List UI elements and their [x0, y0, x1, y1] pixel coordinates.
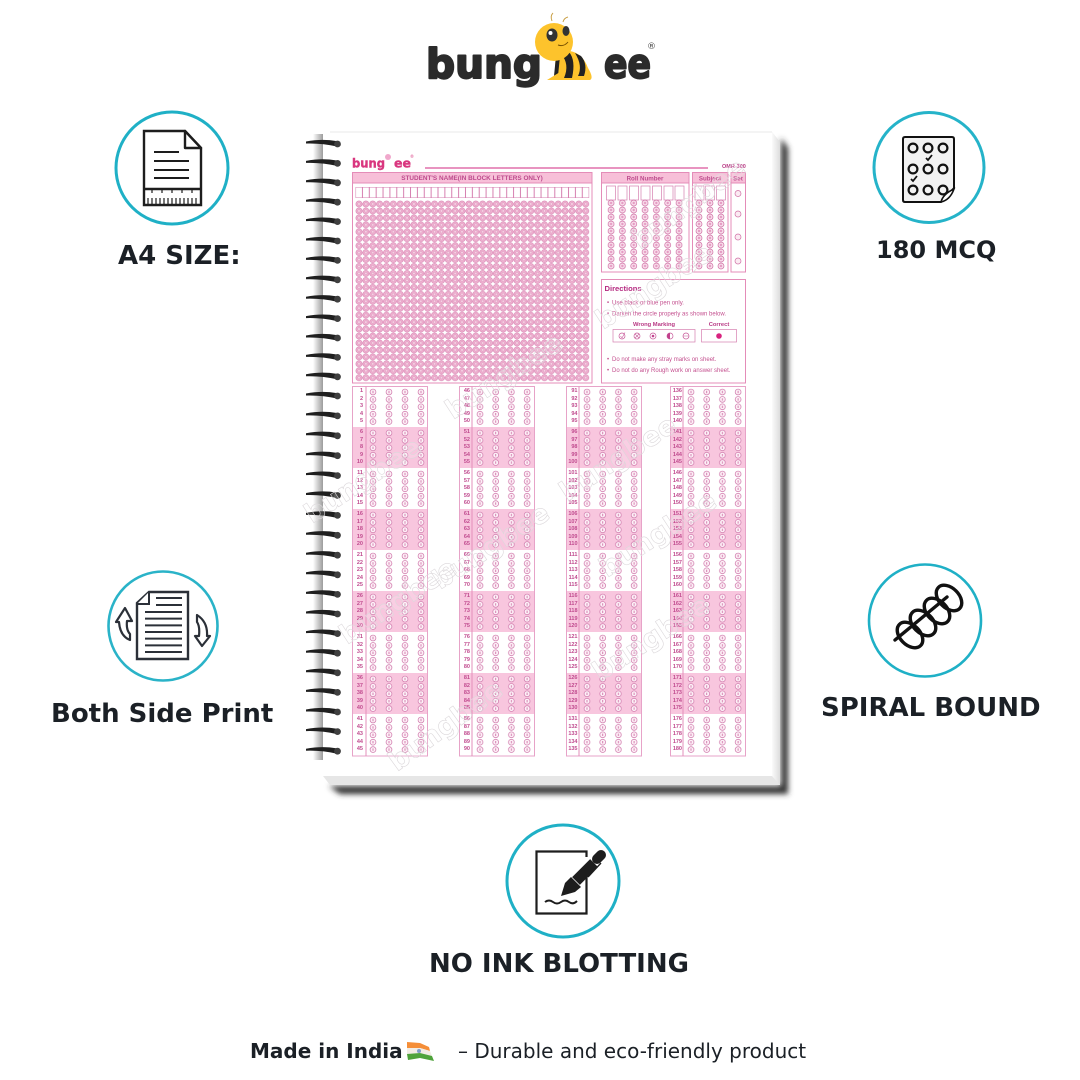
directions panel: Wrong Marking [633, 322, 675, 328]
question numbers column 2: 75 [464, 623, 470, 629]
question numbers column 4: 144 [673, 452, 682, 458]
question numbers column 4: 136 [673, 388, 682, 394]
roll number panel [602, 172, 689, 272]
watermark: repeated bungbee: bungbee [587, 589, 715, 688]
question numbers column 3: 99 [571, 452, 578, 458]
watermark: repeated bungbee: bungbee [299, 431, 427, 530]
icon: A4 document with ruler [116, 112, 228, 224]
question numbers column 2: 46 [464, 388, 470, 394]
question numbers column 3: 135 [568, 746, 578, 752]
question numbers column 4: 148 [673, 485, 682, 491]
question numbers column 1: 3 [360, 403, 363, 409]
question numbers column 4: 178 [673, 731, 682, 737]
question numbers column 3: 92 [571, 396, 578, 402]
directions panel: Use black or blue pen only. [612, 300, 684, 306]
question numbers column 4: 147 [673, 478, 682, 484]
question numbers column 1: 15 [357, 500, 363, 506]
label: spiral bound: SPIRAL BOUND [821, 693, 1041, 723]
question numbers column 1: 18 [357, 526, 363, 532]
question numbers column 3: 108 [568, 526, 578, 532]
question numbers column 4: 145 [673, 459, 682, 465]
question numbers column 3: 110 [569, 541, 578, 547]
question numbers column 4: 155 [673, 541, 682, 547]
question numbers column 2: 67 [464, 560, 470, 566]
question numbers column 4: 179 [673, 739, 682, 745]
question numbers column 2: 60 [464, 500, 470, 506]
question numbers column 3: 131 [568, 716, 578, 722]
question numbers column 3: 98 [571, 444, 578, 450]
directions panel [602, 280, 746, 383]
question numbers column 2: 55 [464, 459, 470, 465]
icon: both side print [108, 572, 218, 680]
question numbers column 2: 90 [464, 746, 470, 752]
question numbers column 4: 171 [673, 675, 682, 681]
question numbers column 1: 32 [357, 642, 363, 648]
question numbers column 3: 95 [571, 418, 578, 424]
question numbers column 3: 118 [569, 608, 578, 614]
label: 180 MCQ: 180 MCQ [876, 236, 996, 264]
answer column 4 [670, 386, 746, 757]
question numbers column 3: 124 [568, 657, 578, 663]
question numbers column 2: 70 [464, 582, 470, 588]
question numbers column 3: 113 [569, 567, 578, 573]
question numbers column 3 [568, 388, 578, 752]
label: no ink blotting: NO INK BLOTTING [429, 949, 689, 979]
question numbers column 3: 123 [568, 649, 578, 655]
question numbers column 4: 167 [673, 642, 682, 648]
question numbers column 3: 121 [568, 634, 578, 640]
question numbers column 2: 88 [464, 731, 470, 737]
question numbers column 1: 27 [357, 601, 363, 607]
question numbers column 4: 149 [673, 493, 682, 499]
question numbers column 1: 30 [357, 623, 363, 629]
question numbers column 2: 61 [464, 511, 470, 517]
question numbers column 1: 40 [357, 705, 363, 711]
question numbers column 2: 59 [464, 493, 470, 499]
question numbers column 4: 159 [673, 575, 682, 581]
question numbers column 3: 120 [568, 623, 578, 629]
question numbers column 1: 8 [360, 444, 363, 450]
question numbers column 2: 77 [464, 642, 470, 648]
question numbers column 3: 133 [568, 731, 578, 737]
question numbers column 1: 19 [357, 534, 363, 540]
question numbers column 2: 73 [464, 608, 470, 614]
question numbers column 4: 140 [673, 418, 682, 424]
watermark: repeated bungbee: bungbee [626, 152, 752, 256]
question numbers column 2: 78 [464, 649, 470, 655]
OMR sheet [352, 154, 746, 757]
icon: Indian flag [407, 1042, 434, 1061]
icon: spiral coil [869, 564, 981, 676]
question numbers column 4: 146 [673, 470, 682, 476]
question numbers column 4: 160 [673, 582, 682, 588]
logo: bungbee: ® [647, 42, 656, 52]
question numbers column 2: 49 [464, 411, 470, 417]
question numbers column 2: 53 [464, 444, 470, 450]
directions panel: Do not make any stray marks on sheet. [612, 357, 717, 363]
question numbers column 4: 169 [673, 657, 682, 663]
watermark: repeated bungbee [299, 152, 752, 778]
question numbers column 4: 157 [673, 560, 682, 566]
watermark: repeated bungbee: bungbee [440, 327, 568, 426]
question numbers column 2: 82 [464, 683, 470, 689]
question numbers column 4: 174 [673, 698, 682, 704]
question numbers column 1: 38 [357, 690, 363, 696]
question numbers column 3: 103 [568, 485, 578, 491]
question numbers column 3: 107 [568, 519, 578, 525]
watermark: repeated bungbee: bungbee [594, 485, 722, 584]
question numbers column 2: 62 [464, 519, 470, 525]
directions panel: Darken the circle properly as shown below. [612, 312, 726, 318]
spiral binding [306, 140, 341, 755]
question numbers column 2: 56 [464, 470, 470, 476]
question numbers column 3: 132 [568, 724, 578, 730]
question numbers column 2: 83 [464, 690, 470, 696]
question numbers column 3: 102 [568, 478, 578, 484]
question numbers column 3: 94 [571, 411, 578, 417]
question numbers column 4: 156 [673, 552, 682, 558]
question numbers column 2: 87 [464, 724, 470, 730]
question numbers column 2: 68 [464, 567, 470, 573]
question numbers column 1: 25 [357, 582, 363, 588]
question numbers column 1: 26 [357, 593, 363, 599]
question numbers column 1: 23 [357, 567, 363, 573]
question numbers column 4: 173 [673, 690, 682, 696]
question numbers column 2: 80 [464, 664, 470, 670]
OMR sheet: OMR-300 [722, 164, 746, 170]
question numbers column 1: 33 [357, 649, 363, 655]
icon: MCQ sheet [874, 112, 984, 222]
question numbers column 2: 47 [464, 396, 470, 402]
directions panel: • [607, 312, 609, 318]
question numbers column 4: 161 [673, 593, 682, 599]
question numbers column 1: 17 [357, 519, 363, 525]
question numbers column 1: 31 [357, 634, 363, 640]
question numbers column 2: 51 [464, 429, 470, 435]
logo: bungbee [426, 13, 656, 88]
question numbers column 1: 7 [360, 437, 363, 443]
question numbers column 2: 69 [464, 575, 470, 581]
question numbers column 1: 4 [360, 411, 363, 417]
question numbers column 3: 130 [568, 705, 578, 711]
question numbers column 2: 71 [464, 593, 470, 599]
question numbers column 3: 127 [568, 683, 578, 689]
footer made in India: – Durable and eco-friendly product [458, 1039, 806, 1063]
question numbers column 1: 29 [357, 616, 363, 622]
question numbers column 2: 54 [464, 452, 470, 458]
directions panel: • [607, 357, 609, 363]
question numbers column 1: 43 [357, 731, 363, 737]
question numbers column 1: 13 [357, 485, 363, 491]
answer column 2 [460, 386, 535, 757]
question numbers column 3: 96 [571, 429, 578, 435]
question numbers column 2: 48 [464, 403, 470, 409]
question numbers column 1: 5 [360, 418, 363, 424]
question numbers column 1: 14 [357, 493, 363, 499]
question numbers column 1: 39 [357, 698, 363, 704]
logo: bungbee: ee [604, 40, 651, 88]
question numbers column 3: 119 [569, 616, 578, 622]
question numbers column 4: 154 [673, 534, 682, 540]
question numbers column 4: 175 [673, 705, 682, 711]
sheet logo [352, 154, 414, 170]
question numbers column 1: 45 [357, 746, 363, 752]
question numbers column 4: 141 [673, 429, 682, 435]
question numbers column 4: 143 [673, 444, 682, 450]
question numbers column 3: 122 [568, 642, 578, 648]
footer made in India [250, 1039, 806, 1063]
question numbers column 1: 36 [357, 675, 363, 681]
question numbers column 1: 6 [360, 429, 363, 435]
question numbers column 4: 165 [673, 623, 682, 629]
question numbers column 1 [356, 388, 364, 752]
question numbers column 1: 12 [357, 478, 363, 484]
question numbers column 4: 163 [673, 608, 682, 614]
question numbers column 4: 142 [673, 437, 682, 443]
question numbers column 3: 97 [571, 437, 578, 443]
answer column 1 [352, 386, 429, 757]
question numbers column 3: 125 [568, 664, 578, 670]
question numbers column 2: 74 [464, 616, 470, 622]
question numbers column 3: 104 [568, 493, 578, 499]
question numbers column 2: 86 [464, 716, 470, 722]
question numbers column 4: 170 [673, 664, 682, 670]
question numbers column 2: 57 [464, 478, 470, 484]
question numbers column 3: 134 [568, 739, 578, 745]
question numbers column 3: 129 [568, 698, 578, 704]
question numbers column 3: 112 [569, 560, 578, 566]
question numbers column 4: 166 [673, 634, 682, 640]
subject panel [692, 172, 728, 272]
question numbers column 4: 162 [673, 601, 682, 607]
watermark: repeated bungbee: bungbee [383, 674, 509, 778]
question numbers column 2: 89 [464, 739, 470, 745]
question numbers column 1: 37 [357, 683, 363, 689]
logo: bungbee: bung [426, 40, 542, 88]
question numbers column 1: 20 [357, 541, 363, 547]
question numbers column 2: 63 [464, 526, 470, 532]
directions panel: • [607, 300, 609, 306]
subject panel: Subject [699, 176, 721, 182]
question numbers column 4: 151 [673, 511, 682, 517]
question numbers column 2: 66 [464, 552, 470, 558]
question numbers column 2: 81 [464, 675, 470, 681]
question numbers column 2: 76 [464, 634, 470, 640]
question numbers column 1: 2 [360, 396, 363, 402]
question numbers column 4: 177 [673, 724, 682, 730]
question numbers column 2: 64 [464, 534, 470, 540]
question numbers column 4: 176 [673, 716, 682, 722]
question numbers column 4: 139 [673, 411, 682, 417]
question numbers column 1: 24 [357, 575, 363, 581]
question numbers column 3: 109 [568, 534, 578, 540]
question numbers column 4: 152 [673, 519, 682, 525]
watermark: repeated bungbee: bungbee [427, 497, 555, 596]
notebook shadow [329, 138, 788, 794]
set panel: Set [733, 176, 743, 182]
question numbers column 3: 101 [568, 470, 578, 476]
question numbers column 3: 106 [568, 511, 578, 517]
question numbers column 3: 128 [568, 690, 578, 696]
question numbers column 2: 50 [464, 418, 470, 424]
directions panel: Correct [709, 322, 729, 328]
question numbers column 4: 172 [673, 683, 682, 689]
question numbers column 1: 22 [357, 560, 363, 566]
answer column 3 [566, 386, 642, 757]
question numbers column 4: 153 [673, 526, 682, 532]
question numbers column 1: 34 [357, 657, 363, 663]
question numbers column 3: 93 [571, 403, 578, 409]
question numbers column 2: 85 [464, 705, 470, 711]
question numbers column 2: 84 [464, 698, 470, 704]
watermark: repeated bungbee: bungbee [590, 237, 718, 336]
watermark: repeated bungbee: bungbee [334, 552, 462, 651]
question numbers column 1: 41 [357, 716, 363, 722]
set panel [731, 172, 746, 272]
question numbers column 3: 111 [569, 552, 578, 558]
question numbers column 1: 42 [357, 724, 363, 730]
sheet logo: ee [394, 156, 411, 170]
directions panel: Directions [604, 284, 642, 293]
roll number panel: Roll Number [627, 176, 664, 182]
question numbers column 3: 114 [569, 575, 578, 581]
question numbers column 1: 44 [357, 739, 363, 745]
question numbers column 3: 115 [569, 582, 578, 588]
question numbers column 3: 126 [568, 675, 578, 681]
notebook page block [313, 132, 780, 785]
question numbers column 1: 21 [357, 552, 363, 558]
sheet logo: ® [410, 154, 414, 159]
question numbers column 4: 168 [673, 649, 682, 655]
question numbers column 3: 105 [568, 500, 578, 506]
question numbers column 2 [464, 388, 470, 752]
directions panel: Do not do any Rough work on answer sheet. [612, 368, 731, 374]
icon: no ink blotting [507, 825, 619, 937]
label: both side print: Both Side Print [51, 699, 273, 729]
footer made in India: Made in India [250, 1039, 403, 1063]
watermark: repeated bungbee: bungbee [554, 409, 682, 508]
question numbers column 1: 11 [357, 470, 363, 476]
question numbers column 2: 52 [464, 437, 470, 443]
question numbers column 3: 116 [569, 593, 578, 599]
question numbers column 4: 180 [673, 746, 682, 752]
name panel: STUDENT'S NAME(IN BLOCK LETTERS ONLY) [401, 175, 543, 182]
label: A4 size: A4 SIZE: [118, 241, 241, 271]
question numbers column 1: 9 [360, 452, 363, 458]
question numbers column 2: 65 [464, 541, 470, 547]
question numbers column 3: 100 [568, 459, 578, 465]
question numbers column 4: 164 [673, 616, 682, 622]
question numbers column 3: 91 [571, 388, 578, 394]
question numbers column 1: 35 [357, 664, 363, 670]
question numbers column 1: 10 [357, 459, 363, 465]
question numbers column 2: 79 [464, 657, 470, 663]
question numbers column 1: 16 [357, 511, 363, 517]
question numbers column 4 [673, 388, 682, 752]
question numbers column 4: 158 [673, 567, 682, 573]
question numbers column 4: 137 [673, 396, 682, 402]
sheet logo: bung [352, 156, 385, 170]
question numbers column 4: 138 [673, 403, 682, 409]
question numbers column 1: 1 [360, 388, 363, 394]
question numbers column 2: 72 [464, 601, 470, 607]
question numbers column 2: 58 [464, 485, 470, 491]
name panel [352, 172, 592, 383]
question numbers column 1: 28 [357, 608, 363, 614]
directions panel: • [607, 368, 609, 374]
question numbers column 4: 150 [673, 500, 682, 506]
question numbers column 3: 117 [569, 601, 578, 607]
